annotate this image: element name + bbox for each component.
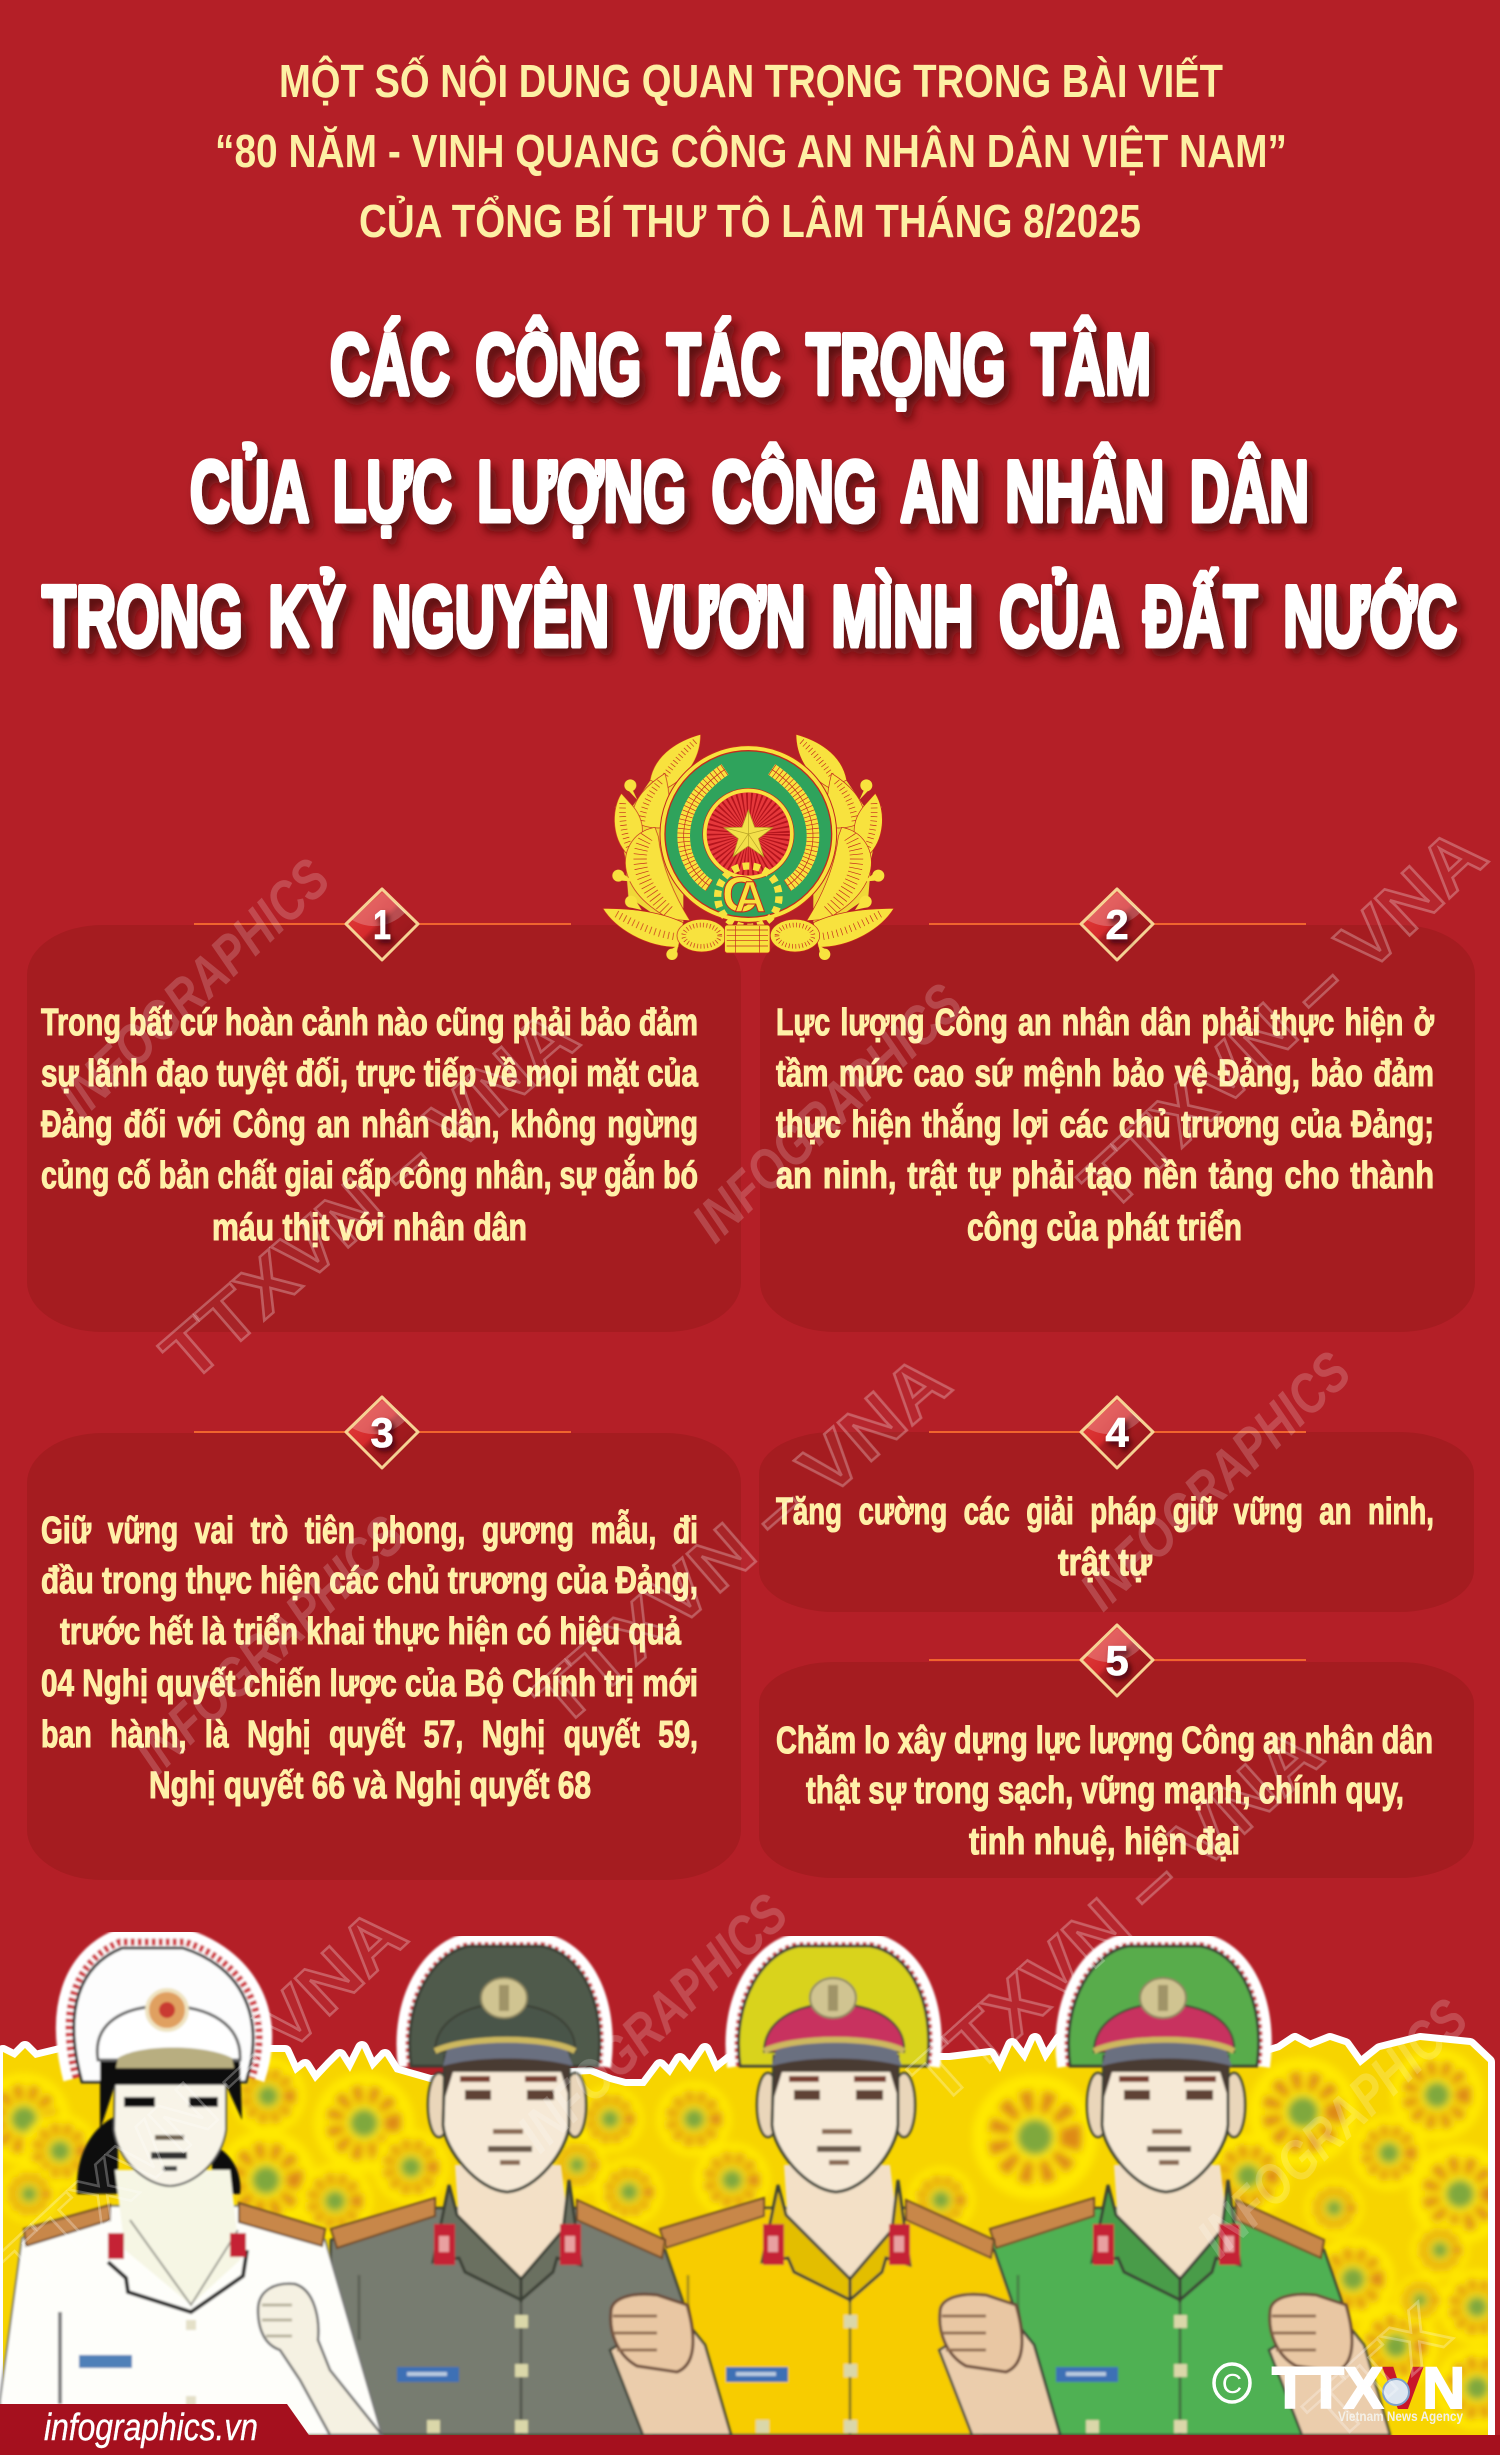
watermarks: TTXVN – VNA <box>895 1710 1337 2120</box>
panel 2 text: công của phát triển <box>967 1207 1242 1249</box>
panel 1 text: Trong bất cứ hoàn cảnh nào cũng phải bảo đảm <box>41 1002 698 1044</box>
officer in green uniform <box>984 1946 1390 2435</box>
watermarks: TTX <box>1290 2288 1465 2455</box>
item 2 marker <box>929 889 1306 960</box>
panel 2 text <box>776 1002 1435 1249</box>
item 5 marker: 5 <box>1105 1637 1129 1684</box>
item 5 marker <box>929 1625 1306 1696</box>
panel 3 text: ban hành, là Nghị quyết 57, Nghị quyết 59, <box>41 1714 698 1756</box>
panel 3 text: 04 Nghị quyết chiến lược của Bộ Chính trị mới <box>41 1663 698 1705</box>
panel 1 text: Đảng đối với Công an nhân dân, không ngừng <box>41 1104 698 1146</box>
watermarks <box>0 811 1500 2455</box>
item 2 marker: 2 <box>1105 901 1129 948</box>
panel 5 text: tinh nhuệ, hiện đại <box>969 1821 1240 1863</box>
footer tab: infographics.vn <box>0 2404 311 2455</box>
title <box>42 317 1457 665</box>
item 3 marker <box>194 1397 571 1468</box>
officer in grey-green uniform <box>325 1946 731 2435</box>
panel 1 text: sự lãnh đạo tuyệt đối, trực tiếp về mọi mặt của <box>41 1053 699 1095</box>
emblem of the People's Public Security: A <box>734 874 766 922</box>
watermarks: TTXVN – VNA <box>518 1338 965 1742</box>
panel 3 text: đầu trong thực hiện các chủ trương của Đảng, <box>41 1560 698 1602</box>
header: subtitle <box>215 55 1287 247</box>
watermarks: TTXVN – VNA <box>146 993 593 1397</box>
copyright and TTXVN logo: TTXVN <box>1272 2356 1465 2421</box>
item 3 marker: 3 <box>370 1409 394 1456</box>
officer in yellow uniform <box>654 1946 1060 2435</box>
copyright and TTXVN logo: C <box>1222 2368 1242 2399</box>
panel 3 background <box>27 1433 741 1880</box>
item 1 marker: 1 <box>373 901 391 948</box>
panel 1 text: củng cố bản chất giai cấp công nhân, sự gắn bó <box>41 1153 698 1197</box>
panel 3 text <box>41 1508 698 1807</box>
panel 5 background <box>759 1662 1474 1878</box>
panel 1 text: máu thịt với nhân dân <box>212 1207 527 1249</box>
panel 2 background <box>760 925 1475 1332</box>
panel 1 background <box>27 925 741 1332</box>
header: subtitle: CỦA TỔNG BÍ THƯ TÔ LÂM THÁNG 8/2025 <box>359 195 1141 247</box>
watermarks: INFOGRAPHICS <box>47 846 341 1129</box>
emblem of the People's Public Security <box>603 734 894 960</box>
header: subtitle: MỘT SỐ NỘI DUNG QUAN TRỌNG TRONG BÀI VIẾT <box>279 55 1223 107</box>
item 4 marker <box>929 1397 1306 1468</box>
watermarks: INFOGRAPHICS <box>1068 1339 1362 1622</box>
item 1 marker <box>194 889 571 960</box>
header: subtitle: “80 NĂM - VINH QUANG CÔNG AN NHÂN DÂN VIỆT NAM” <box>215 125 1287 177</box>
watermarks: INFOGRAPHICS <box>122 1503 416 1786</box>
watermarks: INFOGRAPHICS <box>505 1881 799 2164</box>
panel 4 text: trật tự <box>1058 1542 1152 1584</box>
panel 4 text <box>776 1491 1434 1584</box>
illustration: police officers and sunflowers <box>0 1942 1500 2440</box>
panel 3 text: Nghị quyết 66 và Nghị quyết 68 <box>149 1765 591 1807</box>
sunflower field <box>0 2040 1500 2440</box>
bottom strip <box>0 2435 1500 2455</box>
panel 1 text <box>41 1002 699 1249</box>
female officer in white uniform <box>0 1942 382 2435</box>
footer tab: infographics.vn: infographics.vn <box>44 2407 258 2449</box>
copyright and TTXVN logo: Vietnam News Agency <box>1338 2408 1463 2424</box>
panel 4 background <box>759 1432 1474 1612</box>
panel 3 text: Giữ vững vai trò tiên phong, gương mẫu, đi <box>41 1508 698 1552</box>
watermarks: TTXVN – VNA <box>1064 811 1500 1227</box>
panel 5 text <box>776 1720 1433 1863</box>
item 4 marker: 4 <box>1105 1409 1129 1456</box>
panel 3 text: trước hết là triển khai thực hiện có hiệu quả <box>60 1611 682 1653</box>
watermarks: INFOGRAPHICS <box>680 971 974 1254</box>
emblem of the People's Public Security: C <box>722 867 758 923</box>
